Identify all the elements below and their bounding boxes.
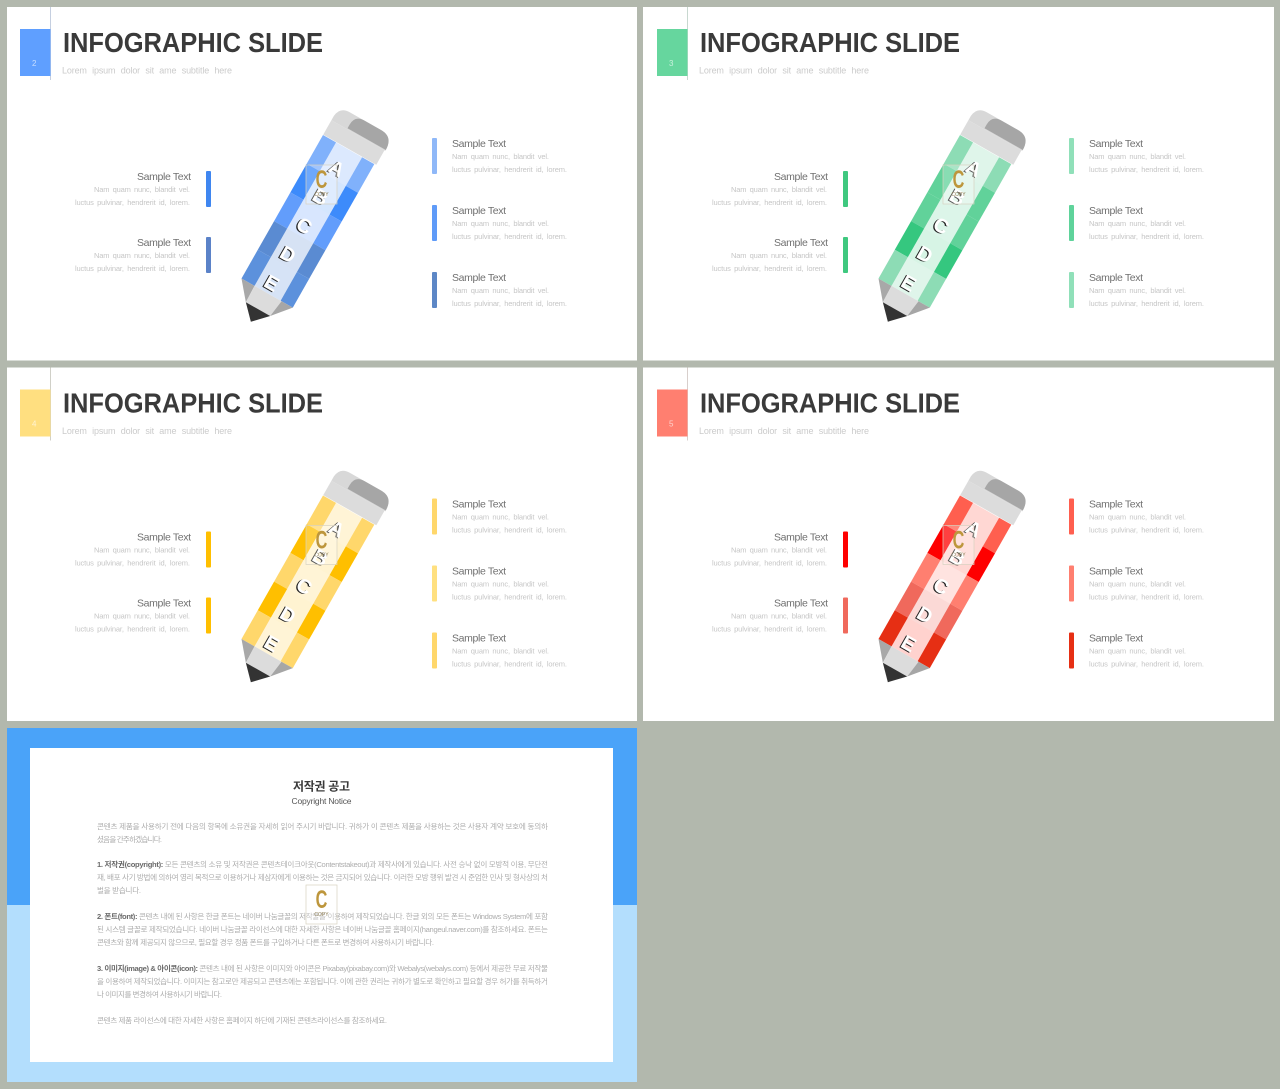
text block: section 1 copyright: 벌을 받습니다.: [97, 885, 141, 895]
right item 2: Sample Text: [1089, 205, 1143, 217]
left item 2: Nam quam nunc, blandit vel.: [731, 612, 827, 620]
icon: pencil with letters A to E: C: [292, 574, 316, 600]
left item 2: luctus pulvinar, hendrerit id, lorem.: [75, 624, 190, 634]
text block: section 2 font: 2. 폰트(font): 콘텐츠 내에 된 사항은 한글 폰트는 네이버 나눔글꼴의 저작물을 이용하여 제작되었습니다. 한글 외의 모든 폰트는 Windows System에 포함: [97, 911, 548, 921]
right item 1: [432, 498, 567, 534]
icon: pencil with letters A to E: D: [911, 603, 935, 629]
panel: green infographic slide: [643, 7, 1274, 360]
icon: pencil with letters A to E: D: [913, 242, 936, 268]
left item 1: luctus pulvinar, hendrerit id, lorem.: [75, 198, 190, 207]
icon: pencil with letters A to E: C: [291, 574, 314, 600]
right item 1: Nam quam nunc, blandit vel.: [452, 152, 549, 161]
panel: yellow infographic slide: [7, 368, 637, 721]
header: slide title block: [20, 7, 323, 80]
icon: pencil with letters A to E: E: [259, 632, 281, 658]
text block: introduction: 콘텐츠 제품을 사용하기 전에 다음의 항목에 소유권을 자세히 읽어 주시기 바랍니다. 귀하가 이 콘텐츠 제품을 사용하는 것은 사용자 계약 보호에 동의하: [97, 821, 548, 831]
header: slide title block: [20, 368, 323, 440]
icon: pencil with letters A to E: B: [308, 185, 332, 211]
icon: pencil with letters A to E: [862, 467, 1030, 698]
left item 2: luctus pulvinar, hendrerit id, lorem.: [75, 264, 190, 273]
watermark: gold C: COPY: [314, 192, 329, 198]
icon: pencil with letters A to E: A: [325, 516, 348, 543]
heading: copyright notice title: 저작권 공고: [293, 778, 350, 794]
text block: introduction: [97, 821, 548, 844]
watermark: gold C: COPY: [314, 552, 329, 558]
icon: pencil with letters A to E: A: [323, 156, 347, 183]
watermark: gold C: [943, 165, 974, 204]
watermark: gold C: [306, 165, 337, 204]
header: slide title block: Lorem ipsum dolor sit ame subtitle here: [62, 66, 232, 76]
heading: copyright notice title: [292, 778, 352, 806]
watermark: gold C: [306, 885, 337, 924]
left item 1: [75, 532, 211, 568]
left item 2: Sample Text: [774, 237, 828, 249]
left item 2: Sample Text: [137, 237, 191, 249]
right item 3: [1069, 272, 1204, 308]
text block: license note: 콘텐츠 제품 라이선스에 대한 자세한 사항은 홈페이지 하단에 기재된 콘텐츠라이선스를 참조하세요.: [97, 1015, 387, 1025]
icon: pencil with letters A to E: B: [307, 546, 330, 572]
left item 1: [712, 171, 848, 207]
icon: pencil with letters A to E: E: [259, 271, 281, 297]
right item 3: Sample Text: [452, 632, 506, 644]
left item 2: Nam quam nunc, blandit vel.: [731, 251, 827, 260]
icon: pencil with letters A to E: C: [929, 574, 953, 600]
icon: pencil with letters A to E: C: [929, 213, 953, 240]
left item 1: Sample Text: [774, 532, 828, 544]
icon: pencil with letters A to E: D: [276, 242, 299, 268]
text block: introduction: 셨음을 간주하겠습니다.: [97, 834, 162, 844]
right item 3: Nam quam nunc, blandit vel.: [452, 646, 549, 656]
right item 2: Nam quam nunc, blandit vel.: [1089, 219, 1186, 228]
icon: pencil with letters A to E: E: [260, 271, 282, 297]
text block: section 2 font: 된 시스템 글꼴로 제작되었습니다. 네이버 나눔글꼴 라이선스에 대한 자세한 사항은 네이버 나눔글꼴 홈페이지(hangeul.naver.com)를 참조하세요. 폰트는: [97, 924, 548, 934]
left item 1: Nam quam nunc, blandit vel.: [94, 185, 190, 194]
icon: pencil with letters A to E: [225, 467, 393, 698]
right item 3: Sample Text: [1089, 272, 1143, 284]
watermark: gold C: C: [316, 887, 327, 914]
left item 1: Nam quam nunc, blandit vel.: [731, 185, 827, 194]
text block: section 3 image and icon: [97, 963, 548, 999]
text block: section 3 image and icon: 을 이용하여 제작되었습니다. 이미지는 참고로만 제공되고 콘텐츠에는 포함됩니다. 이에 관한 권리는 귀하가 별도로 확인하고 필요할 경우 허가를 취득하거: [97, 976, 548, 986]
left item 2: [712, 237, 848, 273]
left item 2: [712, 598, 848, 634]
right item 1: Nam quam nunc, blandit vel.: [1089, 152, 1186, 161]
icon: pencil with letters A to E: C: [928, 574, 951, 600]
right item 2: luctus pulvinar, hendrerit id, lorem.: [452, 592, 567, 602]
icon: pencil with letters A to E: D: [276, 603, 299, 629]
icon: pencil with letters A to E: B: [945, 185, 969, 211]
watermark: gold C: COPY: [951, 192, 966, 198]
icon: pencil with letters A to E: E: [896, 632, 918, 658]
icon: pencil with letters A to E: D: [274, 603, 298, 629]
icon: pencil with letters A to E: [862, 106, 1030, 338]
text block: section 1 copyright: 1. 저작권(copyright): 모든 콘텐츠의 소유 및 저작권은 콘텐츠테이크아웃(Contentstakeout)과 제작사에게 있습니다. 사전 승낙 없이 모방적 이용, 무단전: [97, 859, 548, 869]
left item 2: [75, 237, 211, 273]
right item 1: Sample Text: [1089, 498, 1143, 510]
icon: pencil with letters A to E: B: [307, 185, 330, 211]
right item 1: Sample Text: [1089, 138, 1143, 150]
left item 1: Nam quam nunc, blandit vel.: [94, 546, 190, 554]
icon: pencil with letters A to E: D: [913, 603, 936, 629]
icon: pencil with letters A to E: E: [896, 271, 918, 297]
right item 1: luctus pulvinar, hendrerit id, lorem.: [452, 165, 567, 174]
left item 1: Sample Text: [774, 171, 828, 183]
right item 2: [432, 205, 567, 241]
header: slide title block: [657, 368, 960, 440]
right item 1: [1069, 138, 1204, 174]
right item 3: [432, 632, 567, 668]
right item 2: luctus pulvinar, hendrerit id, lorem.: [1089, 232, 1204, 241]
right item 1: Nam quam nunc, blandit vel.: [452, 512, 549, 522]
icon: pencil with letters A to E: A: [960, 156, 984, 183]
header: slide title block: 5: [669, 420, 674, 428]
right item 1: luctus pulvinar, hendrerit id, lorem.: [452, 526, 567, 534]
left item 2: luctus pulvinar, hendrerit id, lorem.: [712, 624, 827, 634]
icon: pencil with letters A to E: C: [292, 213, 316, 240]
header: slide title block: Lorem ipsum dolor sit ame subtitle here: [62, 426, 232, 436]
icon: pencil with letters A to E: E: [897, 271, 919, 297]
text block: section 1 copyright: 재, 배포 사기 방법에 의하여 영리 목적으로 이용하거나 제삼자에게 이용하는 것은 금지되어 있습니다. 이러한 모방 행위 발견 시 준엄한 민사 및 형사상의 처: [97, 872, 548, 882]
icon: pencil with letters A to E: E: [897, 631, 919, 657]
right item 1: luctus pulvinar, hendrerit id, lorem.: [1089, 165, 1204, 174]
header: slide title block: [657, 7, 960, 80]
watermark: gold C: C: [953, 527, 964, 554]
icon: pencil with letters A to E: C: [291, 214, 314, 240]
right item 3: Sample Text: [452, 272, 506, 284]
header: slide title block: INFOGRAPHIC SLIDE: [63, 388, 323, 419]
icon: pencil with letters A to E: C: [928, 214, 951, 240]
right item 3: luctus pulvinar, hendrerit id, lorem.: [452, 660, 567, 668]
icon: pencil with letters A to E: A: [323, 517, 347, 543]
left item 1: luctus pulvinar, hendrerit id, lorem.: [712, 198, 827, 207]
right item 2: Nam quam nunc, blandit vel.: [1089, 580, 1186, 588]
header: slide title block: 4: [32, 420, 37, 428]
icon: pencil with letters A to E: B: [944, 546, 967, 572]
header: slide title block: 3: [669, 59, 674, 68]
right item 2: Sample Text: [452, 205, 506, 217]
watermark: gold C: C: [316, 167, 327, 194]
icon: pencil with letters A to E: B: [945, 545, 969, 571]
left item 2: Nam quam nunc, blandit vel.: [94, 251, 190, 260]
header: slide title block: Lorem ipsum dolor sit ame subtitle here: [699, 66, 869, 76]
icon: pencil with letters A to E: [225, 106, 393, 338]
text block: section 2 font: [97, 911, 548, 947]
left item 2: Sample Text: [774, 598, 828, 610]
right item 2: [1069, 566, 1204, 602]
left item 2: Sample Text: [137, 598, 191, 610]
icon: pencil with letters A to E: E: [260, 631, 282, 657]
right item 3: Nam quam nunc, blandit vel.: [1089, 646, 1186, 656]
icon: pencil with letters A to E: D: [274, 242, 298, 269]
left item 1: luctus pulvinar, hendrerit id, lorem.: [712, 558, 827, 568]
panel: red infographic slide: [643, 368, 1274, 721]
right item 3: luctus pulvinar, hendrerit id, lorem.: [1089, 299, 1204, 308]
left item 1: Sample Text: [137, 532, 191, 544]
watermark: gold C: [943, 526, 974, 564]
icon: pencil with letters A to E: A: [960, 517, 984, 543]
text block: section 3 image and icon: 나 이미지를 변경하여 사용하시기 바랍니다.: [97, 989, 222, 999]
right item 1: Sample Text: [452, 498, 506, 510]
right item 2: [1069, 205, 1204, 241]
watermark: gold C: C: [953, 167, 964, 194]
panel: blue infographic slide: [7, 7, 637, 360]
header: slide title block: INFOGRAPHIC SLIDE: [63, 27, 323, 58]
right item 2: Nam quam nunc, blandit vel.: [452, 580, 549, 588]
right item 3: [432, 272, 567, 308]
left item 1: luctus pulvinar, hendrerit id, lorem.: [75, 558, 190, 568]
left item 2: Nam quam nunc, blandit vel.: [94, 612, 190, 620]
right item 3: [1069, 632, 1204, 668]
icon: pencil with letters A to E: A: [962, 516, 985, 543]
left item 2: luctus pulvinar, hendrerit id, lorem.: [712, 264, 827, 273]
watermark: gold C: COPY: [314, 912, 329, 918]
header: slide title block: Lorem ipsum dolor sit ame subtitle here: [699, 426, 869, 436]
right item 1: [432, 138, 567, 174]
right item 3: Nam quam nunc, blandit vel.: [452, 286, 549, 295]
right item 3: luctus pulvinar, hendrerit id, lorem.: [1089, 660, 1204, 668]
left item 1: [75, 171, 211, 207]
watermark: gold C: COPY: [951, 552, 966, 558]
icon: pencil with letters A to E: A: [325, 156, 348, 182]
right item 2: [432, 566, 567, 602]
right item 2: luctus pulvinar, hendrerit id, lorem.: [1089, 592, 1204, 602]
right item 1: [1069, 498, 1204, 534]
left item 1: Sample Text: [137, 171, 191, 183]
right item 2: Sample Text: [452, 566, 506, 578]
right item 1: Nam quam nunc, blandit vel.: [1089, 512, 1186, 522]
right item 2: Nam quam nunc, blandit vel.: [452, 219, 549, 228]
header: slide title block: INFOGRAPHIC SLIDE: [700, 27, 960, 58]
right item 1: luctus pulvinar, hendrerit id, lorem.: [1089, 526, 1204, 534]
icon: pencil with letters A to E: A: [962, 156, 985, 182]
header: slide title block: INFOGRAPHIC SLIDE: [700, 388, 960, 419]
right item 3: Nam quam nunc, blandit vel.: [1089, 286, 1186, 295]
left item 1: [712, 532, 848, 568]
text block: section 1 copyright: [97, 859, 548, 895]
right item 2: luctus pulvinar, hendrerit id, lorem.: [452, 232, 567, 241]
right item 3: luctus pulvinar, hendrerit id, lorem.: [452, 299, 567, 308]
heading: copyright notice title: Copyright Notice: [292, 796, 352, 806]
left item 2: [75, 598, 211, 634]
text block: section 3 image and icon: 3. 이미지(image) & 아이콘(icon): 콘텐츠 내에 된 사항은 이미지와 아이콘은 Pixabay(pixabay.com)와 Webalys(webalys.com) 등에서 제공한 무료 저작물: [97, 963, 548, 973]
header: slide title block: 2: [32, 59, 37, 68]
right item 2: Sample Text: [1089, 566, 1143, 578]
right item 1: Sample Text: [452, 138, 506, 150]
text block: section 2 font: 콘텐츠와 함께 제공되지 않으므로, 필요할 경우 정품 폰트를 구입하거나 다른 폰트로 변경하여 사용하시기 바랍니다.: [97, 937, 434, 947]
icon: pencil with letters A to E: B: [308, 545, 332, 571]
icon: pencil with letters A to E: B: [944, 185, 967, 211]
panel: copyright notice: [7, 728, 637, 1082]
left item 1: Nam quam nunc, blandit vel.: [731, 546, 827, 554]
watermark: gold C: [306, 526, 337, 564]
watermark: gold C: C: [316, 527, 327, 554]
icon: pencil with letters A to E: D: [911, 242, 935, 269]
right item 3: Sample Text: [1089, 632, 1143, 644]
